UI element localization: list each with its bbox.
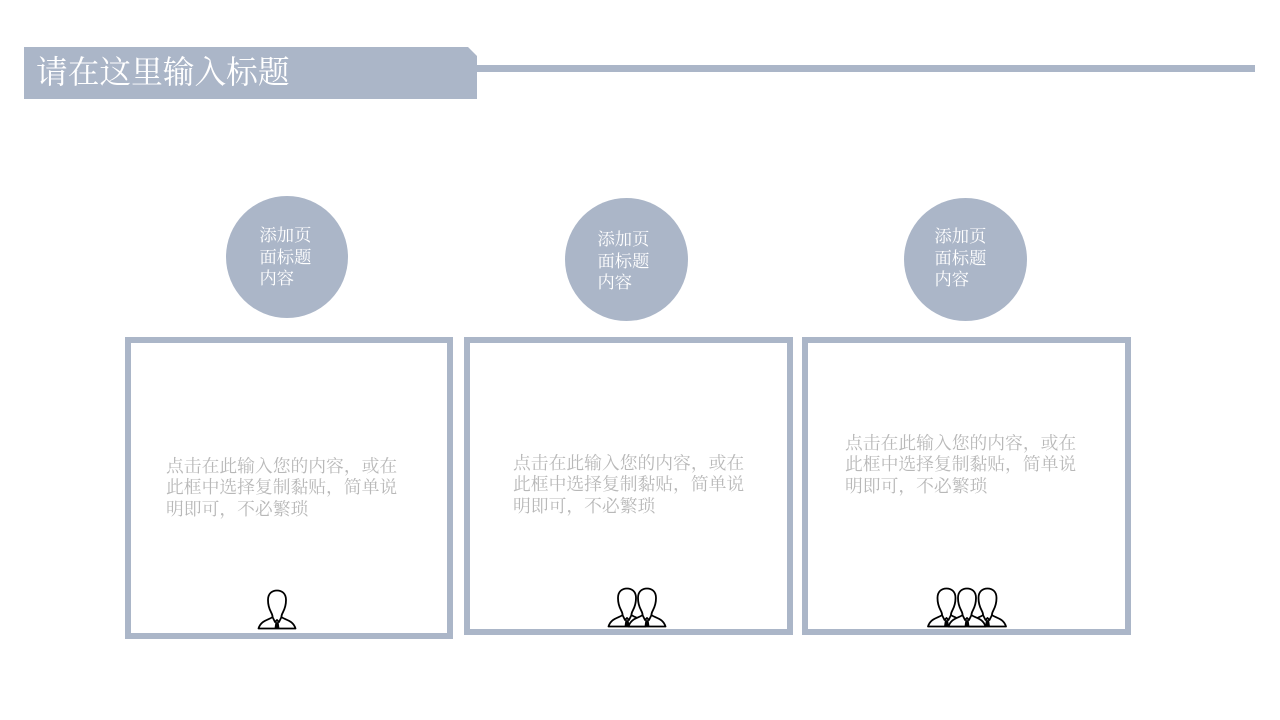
title banner: [24, 47, 477, 99]
circle heading 3: [904, 198, 1027, 321]
circle heading 2: [565, 198, 688, 321]
body text 3: 此框中选择复制黏贴，简单说: [845, 454, 1076, 474]
icon: three people: [927, 588, 1007, 628]
panel: column 2: [464, 198, 793, 635]
title rule: [477, 65, 1255, 72]
circle text 1: 添加页: [260, 226, 311, 245]
circle text 2: 面标题: [598, 252, 649, 270]
body text 2: 点击在此输入您的内容，或在: [513, 453, 744, 473]
text frame 3: [802, 337, 1131, 635]
body text 3: 点击在此输入您的内容，或在: [845, 433, 1076, 453]
icon: one person: [258, 590, 296, 630]
panel: column 3: [802, 198, 1131, 635]
body text 2: 明即可，不必繁琐: [513, 496, 655, 516]
body text 1: 点击在此输入您的内容，或在: [166, 456, 397, 476]
body text 1: 此框中选择复制黏贴，简单说: [166, 477, 397, 497]
circle text 2: [598, 230, 649, 292]
circle text 2: 添加页: [598, 230, 649, 249]
circle text 3: 面标题: [934, 248, 986, 268]
circle heading 1: [226, 196, 348, 318]
text frame 1: [125, 337, 453, 639]
circle text 3: 内容: [934, 270, 969, 289]
body text 2: [513, 453, 744, 516]
body text 1: 明即可，不必繁琐: [166, 499, 308, 519]
circle text 1: 面标题: [260, 248, 311, 266]
circle text 3: [934, 227, 986, 289]
panel: column 1: [125, 196, 453, 639]
icon: two people: [608, 588, 666, 628]
circle text 1: [260, 226, 311, 288]
body text 2: 此框中选择复制黏贴，简单说: [513, 474, 744, 494]
circle text 1: 内容: [260, 269, 294, 288]
circle text 3: 添加页: [934, 227, 986, 246]
title text: 请在这里输入标题: [36, 54, 290, 90]
body text 3: [845, 433, 1076, 496]
text frame 2: [464, 337, 793, 635]
body text 1: [166, 456, 397, 519]
circle text 2: 内容: [598, 273, 632, 292]
body text 3: 明即可，不必繁琐: [845, 476, 987, 496]
